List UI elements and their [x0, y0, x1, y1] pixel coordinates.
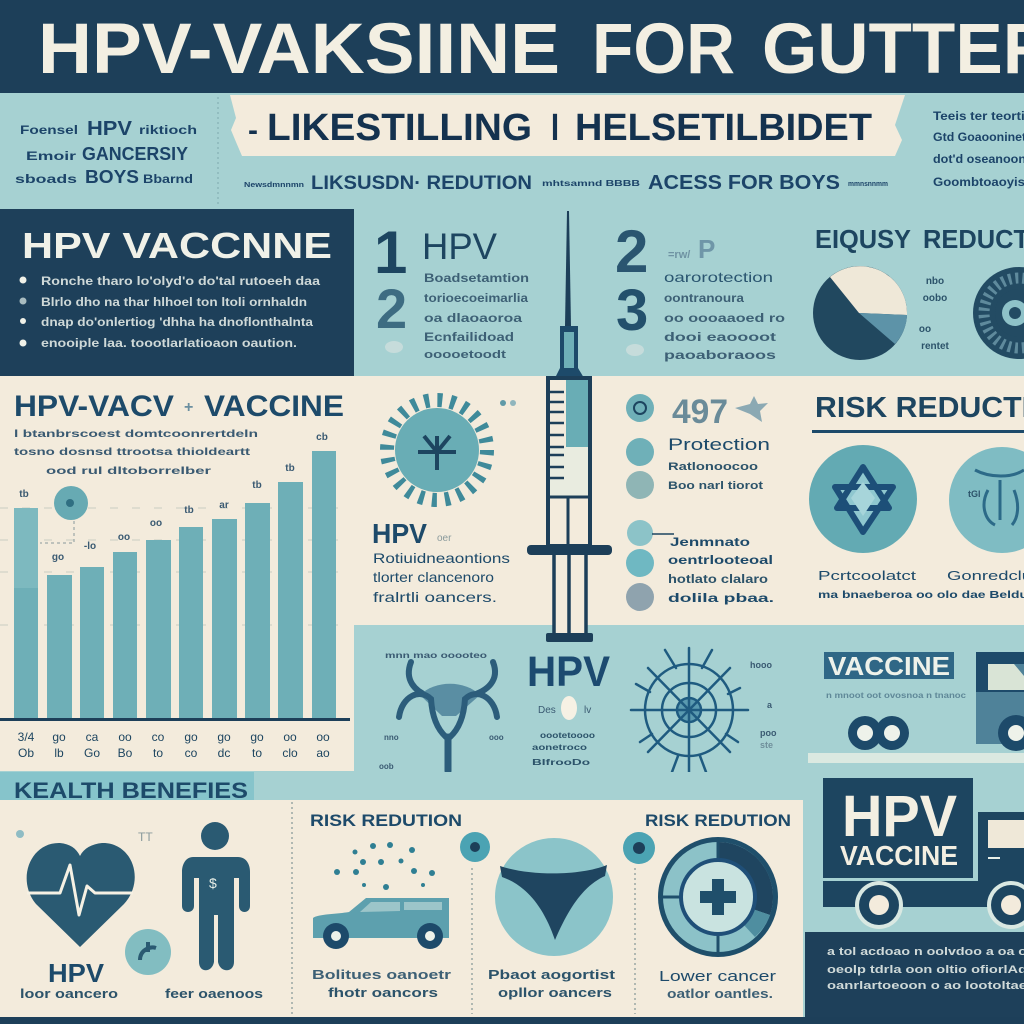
bar value labels: tb — [184, 505, 194, 516]
bar axis labels — [18, 730, 330, 760]
bar value labels: ar — [219, 500, 229, 511]
panel: centre teal icons — [354, 625, 1024, 772]
panel: bar chart — [0, 376, 354, 771]
step 2 right: oarorotection — [664, 269, 773, 285]
panel: footer note — [805, 932, 1024, 1024]
uterus labels: oob — [379, 762, 394, 771]
center HPV label: aonetroco — [532, 743, 587, 752]
risk reduction plus block — [623, 811, 791, 1001]
syringe — [527, 211, 612, 642]
bars — [0, 451, 350, 721]
panel: HPV vaccine dark: dnap do'onlertiog 'dhha ha dnoflonthalnta — [41, 317, 314, 329]
HPV virus text: oer — [437, 533, 452, 544]
subtitle ribbon: HELSETILBIDET — [575, 107, 872, 149]
step 1: 1 — [374, 219, 407, 286]
risk heading: RISK REDUCTI — [815, 392, 1024, 424]
health captions — [20, 958, 263, 1001]
chart heading: HPV-VACV — [14, 390, 174, 423]
bar value labels: oo — [118, 532, 130, 543]
panel: HPV vaccine dark: Ronche tharo lo'olyd'o do'tal rutoeeh daa — [41, 276, 321, 288]
HPV virus text: Rotiuidneaontions — [373, 550, 510, 566]
HPV virus text: fralrtli oancers. — [373, 589, 497, 605]
step 3: 3 — [616, 278, 648, 343]
pie chart — [813, 266, 907, 360]
center HPV label: Des — [538, 705, 556, 716]
center HPV label: oootetoooo — [540, 731, 595, 740]
subtitle ribbon: I — [551, 107, 559, 149]
pie caption: oobo — [923, 293, 947, 304]
panel: HPV vaccine dark — [0, 209, 354, 376]
step 1: torioecoeimarlia — [424, 291, 528, 305]
icon: heart pulse — [27, 843, 135, 947]
bar value labels: tb — [285, 463, 295, 474]
protection column: hotlato clalaro — [668, 572, 768, 586]
bar axis labels: go — [52, 730, 66, 744]
protection column: dolila pbaa. — [668, 591, 774, 605]
right intro text: Teeis ter teortio — [933, 109, 1024, 123]
bar value labels: go — [52, 552, 64, 563]
icon: virus network — [631, 648, 748, 772]
bar axis labels: to — [153, 746, 163, 760]
bar axis labels: 3/4 — [18, 730, 35, 744]
bar axis labels: lb — [54, 746, 64, 760]
step 2 right: dooi eaoooot — [664, 330, 776, 344]
bar axis labels: Go — [84, 746, 100, 760]
left intro text: HPV — [87, 118, 133, 140]
pie caption — [919, 276, 950, 352]
bar axis labels: co — [185, 746, 198, 760]
icon: organ circle — [949, 447, 1024, 553]
bar value labels: -lo — [84, 541, 96, 552]
health captions: loor oancero — [20, 986, 118, 1001]
access line: ACESS FOR BOYS — [648, 172, 840, 194]
panel: footer note: oanrlartoeoon o ao lootoltae — [827, 980, 1024, 992]
chart heading: VACCINE — [204, 390, 344, 423]
risk captions: ma bnaeberoa oo olo dae Beldu — [818, 589, 1024, 601]
step 1: ooooetoodt — [424, 349, 506, 361]
left intro text: GANCERSIY — [82, 144, 188, 164]
step 1: Ecnfailidoad — [424, 330, 514, 344]
panel: health benefits — [0, 800, 803, 1018]
title banner — [0, 0, 1024, 93]
HPV virus text: HPV — [372, 518, 427, 549]
icon captions: a — [767, 700, 773, 710]
risk reduction plus block: oatlor oantles. — [667, 986, 773, 1001]
panel: bar chart: tosno dosnsd ttrootsa thioldeartt — [14, 446, 251, 458]
uterus labels: ooo — [489, 733, 504, 742]
panel: HPV vaccine truck: VACCINE — [840, 840, 958, 871]
step 2 right: oo oooaaoed ro — [664, 311, 785, 325]
left intro text: BOYS — [85, 167, 139, 187]
subtitle ribbon: - — [248, 114, 258, 147]
step 2 right — [615, 218, 785, 362]
panel: bar chart: l btanbrscoest domtcoonrertdeln — [14, 428, 258, 440]
step 2 left: 2 — [376, 277, 407, 340]
left intro text — [15, 118, 197, 187]
bar value labels: oo — [150, 518, 162, 529]
risk captions — [818, 568, 1024, 601]
pie caption: rentet — [921, 341, 950, 352]
vaccine label truck: VACCINE — [828, 651, 950, 681]
chart heading: + — [184, 399, 193, 416]
bar axis labels: dc — [218, 746, 230, 760]
step 2 right: paoaboraoos — [664, 348, 776, 362]
step 2 right: oontranoura — [664, 291, 744, 305]
icon: person — [182, 822, 250, 970]
icon: organ circle: tGl — [968, 489, 980, 499]
protection column: oentrlooteoal — [668, 553, 773, 567]
risk reduction circle block — [488, 838, 616, 1000]
icon: virus — [387, 400, 516, 500]
bar axis labels: oo — [118, 730, 132, 744]
bar axis labels: ca — [86, 730, 99, 744]
panel: footer note: oeolp tdrla oon oltio ofiorlAd — [827, 964, 1024, 976]
section heading: health benefits: KEALTH BENEFIES — [14, 778, 248, 803]
health captions: feer oaenoos — [165, 986, 263, 1001]
protection column: Boo narl tiorot — [668, 480, 763, 492]
step 2 right: 2 — [615, 218, 648, 285]
equity heading: EIQUSY — [815, 224, 911, 254]
risk reduction plus block: RISK REDUTION — [645, 811, 791, 830]
pie caption: nbo — [926, 276, 944, 287]
bar axis labels: oo — [283, 730, 297, 744]
pie caption: oo — [919, 324, 931, 335]
bar value labels — [19, 432, 328, 563]
bar value labels: cb — [316, 432, 328, 443]
access line: mmnsnnmm — [848, 181, 888, 188]
risk captions: Gonredclu — [947, 568, 1024, 583]
step 1: oa dlaoaoroa — [424, 311, 522, 325]
bar axis labels: Bo — [118, 746, 133, 760]
center HPV label: lv — [584, 705, 591, 716]
step 2 right: P — [698, 234, 715, 264]
health captions: HPV — [48, 958, 105, 988]
panel: HPV vaccine dark: HPV VACCNNE — [22, 225, 332, 266]
center HPV label: BIfrooDo — [532, 758, 590, 767]
icon: chart marker — [40, 486, 88, 543]
HPV virus text — [372, 518, 510, 605]
protection column: Protection — [668, 435, 770, 454]
HPV virus text: tlorter clancenoro — [373, 569, 494, 585]
icon captions: hooo — [750, 660, 772, 670]
risk reduction car block: Bolitues oanoetr — [312, 967, 451, 982]
uterus labels — [379, 651, 504, 771]
chart heading — [14, 390, 344, 423]
left intro text: Foensel — [20, 123, 78, 137]
risk reduction plus block: Lower cancer — [659, 968, 776, 985]
panel: centre cream — [354, 376, 1024, 626]
access line: mhtsamnd BBBB — [542, 179, 640, 188]
bar axis labels: go — [250, 730, 264, 744]
uterus labels: nno — [384, 733, 399, 742]
left intro text: Emoir — [26, 149, 76, 163]
bar value labels: tb — [252, 480, 262, 491]
panel: HPV vaccine dark: enooiple laa. toootlarlatioaon oaution. — [41, 338, 297, 350]
risk reduction car block: RISK REDUTION — [310, 811, 462, 830]
icon: person: $ — [209, 875, 217, 891]
right intro text — [933, 109, 1024, 189]
bar axis labels: oo — [316, 730, 330, 744]
bar axis labels: to — [252, 746, 262, 760]
risk reduction circle block: opllor oancers — [498, 985, 612, 1000]
bar axis labels: Ob — [18, 746, 34, 760]
step 2 right: =rw/ — [668, 249, 690, 261]
protection column — [626, 393, 774, 611]
icon: uterus — [399, 662, 497, 771]
panel: footer note: a tol acdoao n oolvdoo a oa o — [827, 946, 1024, 958]
icon captions — [750, 660, 777, 750]
bottom edge — [0, 1017, 1024, 1024]
subtitle band — [0, 93, 1024, 209]
panel: HPV vaccine truck — [803, 772, 1024, 932]
bar axis labels: go — [184, 730, 198, 744]
left intro text: riktioch — [139, 123, 197, 137]
uterus labels: mnn mao ooooteo — [385, 651, 487, 660]
risk reduction car block — [310, 811, 490, 1000]
left intro text: sboads — [15, 172, 77, 186]
protection column: 497 — [672, 393, 728, 431]
center HPV label — [527, 648, 610, 767]
ghost marks: TT — [138, 830, 153, 844]
panel: HPV vaccine truck: HPV — [842, 784, 957, 849]
icon: star circle — [809, 445, 917, 553]
ghost marks — [16, 830, 153, 844]
protection column: Ratlonoocoo — [668, 461, 758, 473]
center HPV label: HPV — [527, 648, 610, 696]
icon: badge — [125, 929, 171, 975]
title banner: HPV-VAKSIINE — [38, 10, 560, 89]
bar axis labels: go — [217, 730, 231, 744]
protection column: Jenmnato — [670, 535, 750, 549]
left intro text: Bbarnd — [143, 172, 193, 186]
section heading: health benefits — [0, 772, 1024, 803]
subtitle ribbon — [230, 95, 905, 156]
vaccine label truck — [824, 651, 1024, 751]
panel: HPV vaccine dark: Blrlo dho na thar hlhoel ton ltoli ornhaldn — [41, 297, 307, 309]
title banner: FOR — [592, 10, 735, 89]
icon captions: poo — [760, 728, 777, 738]
step 1: HPV — [422, 226, 497, 267]
bar axis labels: ao — [316, 746, 330, 760]
panel: bar chart: ood rul dltoborrelber — [46, 465, 211, 477]
icon captions: ste — [760, 740, 773, 750]
bar value labels: tb — [19, 489, 29, 500]
step 1: Boadsetamtion — [424, 271, 529, 285]
icon: round seal — [973, 267, 1024, 359]
vaccine label truck: n mnoot oot ovosnoa n tnanoc — [826, 691, 967, 700]
access line — [244, 172, 888, 194]
access line: Newsdmnnmn — [244, 182, 304, 189]
bar axis labels: co — [152, 730, 165, 744]
panel: numbered steps — [354, 209, 1024, 376]
subtitle ribbon: LIKESTILLING — [267, 107, 532, 149]
step 1 — [374, 219, 529, 361]
bar axis labels: clo — [282, 746, 298, 760]
risk reduction car block: fhotr oancors — [328, 985, 438, 1000]
risk reduction circle block: Pbaot aogortist — [488, 967, 616, 982]
access line: LIKSUSDN· REDUTION — [311, 173, 532, 194]
risk captions: Pcrtcoolatct — [818, 568, 917, 583]
equity heading — [815, 224, 1024, 254]
right intro text: Goombtoaoyis — [933, 175, 1024, 189]
